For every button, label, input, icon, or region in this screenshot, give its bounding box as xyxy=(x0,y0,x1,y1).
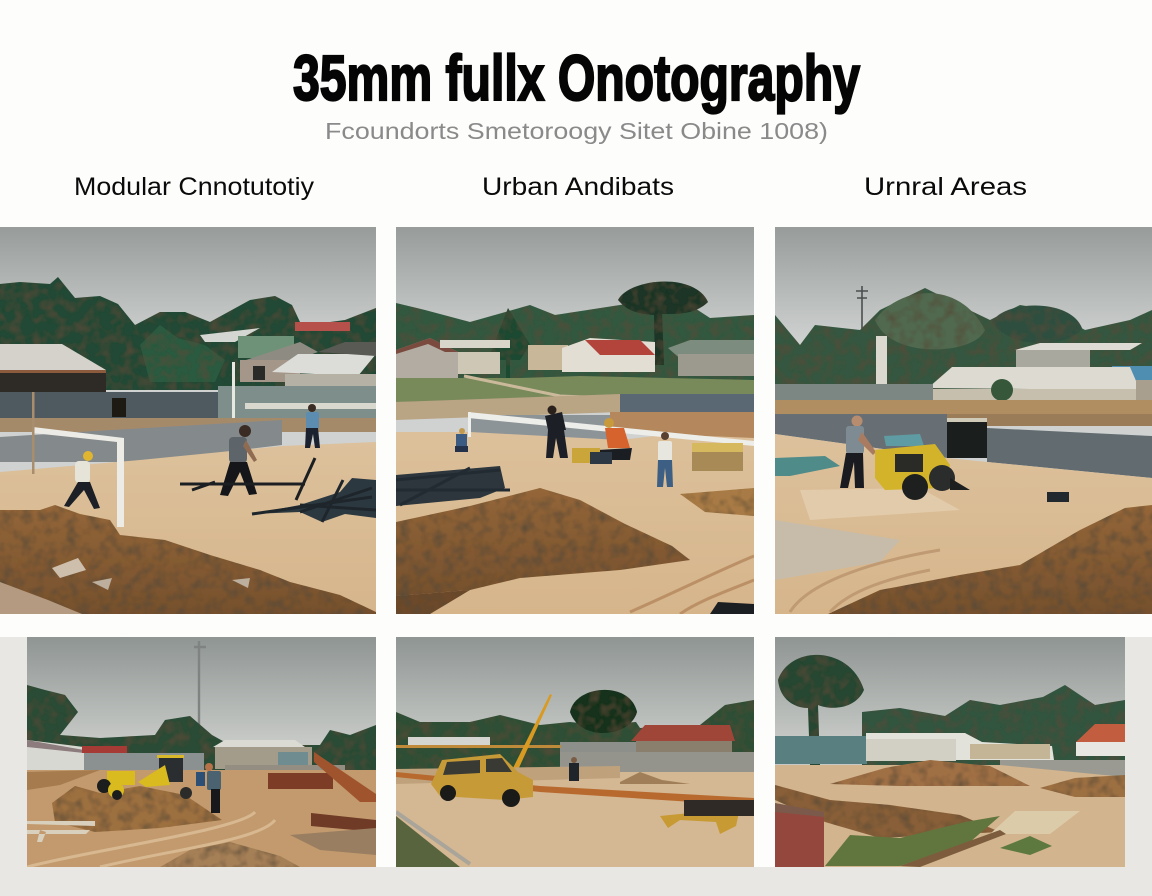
equipment boxes xyxy=(692,452,743,471)
dirt heap xyxy=(0,505,376,614)
ground xyxy=(0,442,376,614)
column heading: right: Urnral Areas xyxy=(864,173,1027,201)
white gate frame xyxy=(33,427,124,527)
subtitle: Fcoundorts Smetoroogy Sitet Obine 1008) xyxy=(325,118,828,144)
yellow roller machine xyxy=(875,434,970,500)
small bush xyxy=(991,379,1013,401)
column heading: centre: Urban Andibats xyxy=(482,173,674,201)
white horizontal rail xyxy=(468,412,754,446)
dirt heaps xyxy=(830,760,1030,786)
trees xyxy=(862,685,1125,765)
buildings xyxy=(775,736,867,764)
trees xyxy=(27,685,376,775)
red brick box xyxy=(775,812,824,867)
tools xyxy=(180,458,315,500)
workers xyxy=(545,406,568,458)
trees xyxy=(0,277,376,390)
photo: bottom left excavator xyxy=(27,637,376,867)
utility pole xyxy=(856,286,868,329)
column heading: left: Modular Cnnotutotiy xyxy=(74,173,315,201)
buildings xyxy=(408,737,490,746)
worker: grey shirt xyxy=(220,425,257,496)
worker: blue shirt xyxy=(305,404,320,448)
worker: yellow hat xyxy=(64,451,100,509)
worker: white shirt xyxy=(657,432,673,487)
worker: orange shirt xyxy=(598,418,632,460)
large roofed shed xyxy=(0,344,106,370)
trees xyxy=(396,303,754,380)
photo: top left construction site xyxy=(0,227,376,614)
worker xyxy=(569,757,579,781)
ground xyxy=(396,424,754,614)
yellow excavator xyxy=(97,755,192,800)
dirt heap xyxy=(620,772,690,784)
green grass patches xyxy=(825,816,1000,866)
rust steel plates xyxy=(268,773,333,789)
worker: grey shirt xyxy=(840,416,876,488)
dirt heap xyxy=(396,488,690,596)
green field xyxy=(396,376,754,402)
small crouching worker xyxy=(455,428,468,452)
teal tarpaulin xyxy=(775,456,840,476)
site fence xyxy=(775,384,933,400)
ground xyxy=(775,765,1125,867)
fence line xyxy=(620,394,754,412)
background houses xyxy=(200,328,260,342)
lumber xyxy=(27,821,95,842)
crane arm xyxy=(513,694,552,770)
houses xyxy=(396,338,458,378)
photo: top centre construction site xyxy=(396,227,754,614)
bottom band backdrop xyxy=(0,637,1152,896)
trees xyxy=(775,288,1152,395)
houses xyxy=(1015,343,1142,350)
buildings xyxy=(27,740,84,775)
steel pipe pile xyxy=(266,478,376,522)
worker xyxy=(196,763,221,813)
steel pipe pile xyxy=(396,466,505,506)
light pole xyxy=(194,641,206,772)
ground tracks xyxy=(630,556,754,614)
dirt heap xyxy=(828,505,1152,614)
white concrete column xyxy=(876,336,887,384)
dirt heap xyxy=(52,786,222,832)
ground xyxy=(775,434,1152,614)
ground tracks xyxy=(790,550,940,612)
photo: top right construction site xyxy=(775,227,1152,614)
yellow car xyxy=(431,754,533,807)
plank path xyxy=(990,811,1080,834)
ground xyxy=(396,772,754,867)
fence walls xyxy=(0,392,218,418)
steel beams xyxy=(396,772,754,806)
title: 35mm fullx Onotography xyxy=(293,42,860,114)
ground xyxy=(27,770,376,867)
trees xyxy=(396,700,754,770)
photo: bottom centre yellow car xyxy=(396,637,754,867)
photo: bottom right field with houses xyxy=(775,637,1125,867)
small black object xyxy=(1047,492,1069,502)
